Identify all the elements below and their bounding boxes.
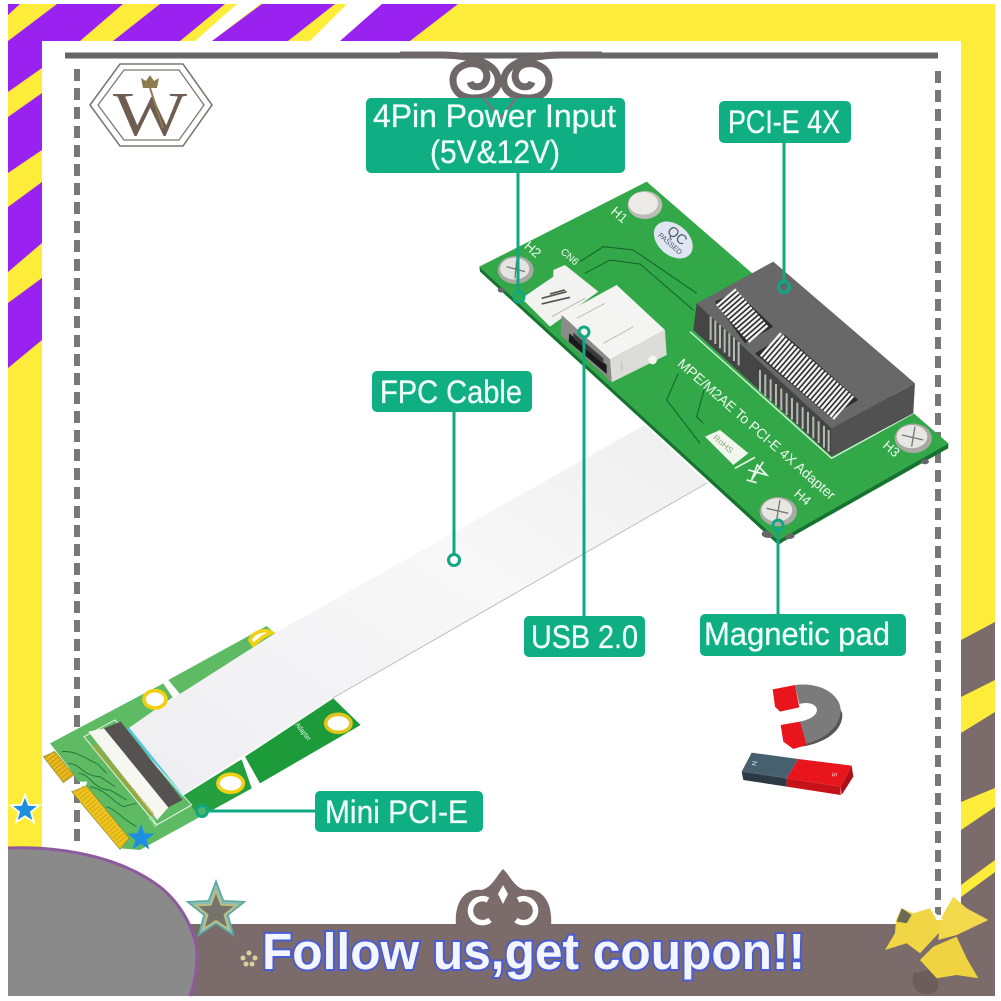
board labels: H1 (608, 204, 631, 226)
board labels: H3 (880, 438, 903, 460)
gold fingers large (72, 786, 129, 849)
board traces (580, 247, 705, 443)
QC sticker (647, 214, 700, 266)
ornament: top scroll (400, 55, 602, 118)
icon: small dotted flower (240, 950, 258, 966)
screw H1 (628, 191, 662, 219)
RoHS sticker (705, 430, 748, 465)
dashed side rules (77, 69, 938, 915)
banner text: Follow us,get coupon!! (262, 923, 805, 980)
lower strip of card (245, 698, 361, 783)
board face (479, 182, 948, 540)
logo: W hexagon (90, 64, 212, 149)
4-pin power connector (522, 265, 598, 327)
QC sticker: PASSED (656, 231, 684, 257)
screw H3 (895, 424, 932, 453)
horseshoe magnet (773, 685, 842, 749)
FPC cyan edge (128, 728, 183, 796)
bottom banner background (8, 924, 995, 996)
traces (62, 751, 137, 827)
card body (50, 683, 252, 850)
label: 4Pin Power Input: 4Pin Power Input (373, 98, 616, 134)
leader lines and dots (196, 143, 790, 816)
FPC cable (128, 425, 707, 795)
board labels: H2 (521, 238, 544, 261)
label: 4Pin Power Input: (5V&12V) (430, 134, 560, 170)
QC sticker: QC (664, 222, 691, 248)
FPC connector (84, 720, 192, 825)
screw H2 (498, 256, 534, 284)
bar magnet (742, 753, 853, 795)
icon: outlined star (187, 881, 245, 935)
board labels: MPE/M2AE To PCI-E 4X Adapter (675, 355, 839, 503)
adapter board (479, 182, 948, 545)
icon: yellow leaves (885, 897, 988, 994)
board labels (521, 204, 903, 509)
board edge (479, 267, 948, 545)
label: Magnetic pad: Magnetic pad (704, 616, 890, 652)
bar magnet: S (830, 772, 838, 778)
USB 2.0 port (561, 285, 667, 382)
Mini PCI-E card (43, 626, 361, 850)
Mini PCI-E card: CN1 (147, 816, 159, 830)
board labels: H4 (791, 486, 814, 509)
label: Mini PCI-E: Mini PCI-E (325, 794, 468, 830)
bar magnet: N (750, 760, 758, 766)
mounting holes (144, 631, 351, 792)
standoffs (498, 287, 929, 539)
label: USB 2.0: USB 2.0 (531, 619, 638, 655)
top rule (65, 52, 938, 58)
bin symbol (735, 457, 767, 483)
ornament: bottom scroll (456, 869, 551, 926)
icon: magnets (742, 685, 853, 795)
board labels: CN6 (558, 247, 581, 268)
PCI-E 4X slot (690, 262, 915, 458)
screw H4 (760, 497, 797, 526)
upper strip of card (168, 626, 275, 694)
RoHS sticker: RoHS (711, 433, 735, 455)
grey corner shape (8, 848, 197, 996)
logo: W hexagon: W (113, 81, 188, 149)
icon: blue star left (11, 795, 39, 822)
slot pins (711, 317, 829, 452)
gold fingers small (43, 752, 74, 783)
label: FPC Cable: FPC Cable (380, 374, 522, 410)
icon: blue star on card (128, 824, 154, 849)
label: 4Pin Power Input (366, 98, 625, 173)
card text: Adapter (293, 721, 313, 743)
label: PCI-E 4X: PCI-E 4X (728, 104, 840, 140)
